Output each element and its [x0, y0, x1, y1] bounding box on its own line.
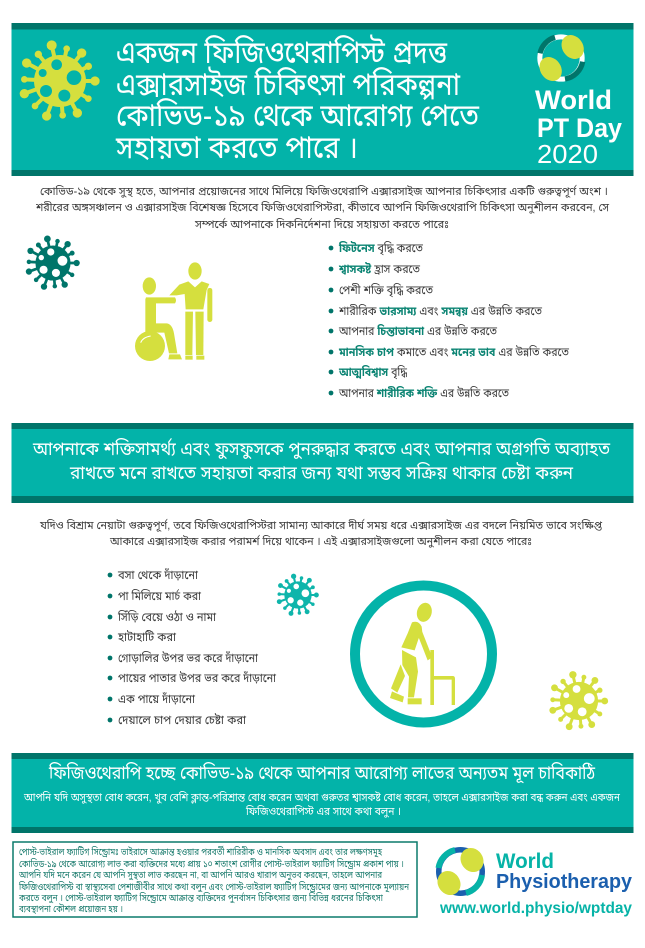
title: এক্সারসাইজ চিকিৎসা পরিকল্পনা	[116, 67, 461, 102]
logo: World PT Day 2020	[535, 31, 622, 169]
callout: post-viral fatigue syndrome: ফিজিওথেরাপিস্ট বা স্বাস্থ্যসেবা পেশাজীবীর সাথে কথা বলুন এবং পোস্ট-ভাইরাল ফ্যাটিগ সিন্ড্রোমের জন্য আপনাকে মূল্যায়ন	[18, 881, 409, 893]
callout: post-viral fatigue syndrome: পোস্ট-ভাইরাল ফ্যাটিগ সিন্ড্রোমঃ ভাইরাসে আক্রান্ত হওয়ার পরবর্তী শারিরীক ও মানসিক অবসাদ এবং তার লক্ষণসমূহ	[19, 846, 383, 858]
list: benefits: আপনার চিন্তাভাবনা এর উন্নতি করতে	[338, 323, 497, 338]
logo wordmark: World	[535, 85, 612, 115]
logo: World Physiotherapy	[433, 843, 633, 917]
logo wordmark	[535, 85, 622, 169]
intro paragraph: কোভিড-১৯ থেকে সুস্থ হতে, আপনার প্রয়োজনের সাথে মিলিয়ে ফিজিওথেরাপি এক্সারসাইজ আপনার চিকিৎসার একটি গুরুত্বপূর্ণ অংশ ।	[40, 184, 608, 198]
list: benefits: আপনার শারীরিক শক্তি এর উন্নতি করতে	[338, 385, 509, 400]
list: exercises: সিঁড়ি বেয়ে ওঠা ও নামা	[117, 609, 217, 624]
paragraph: short bursts advice	[39, 518, 602, 548]
banner: key to recovery	[12, 753, 634, 833]
callout: post-viral fatigue syndrome: ব্যবস্থাপনা কৌশল প্রয়োজন হয় ।	[18, 903, 123, 915]
paragraph: short bursts advice: যদিও বিশ্রাম নেয়াটা গুরুত্বপূর্ণ, তবে ফিজিওথেরাপিস্টরা সামান্য আকারে দীর্ঘ সময় ধরে এক্সারসাইজ এর বদলে নিয়মিত ভাবে সংক্ষিপ্ত	[39, 518, 602, 532]
logo wordmark: 2020	[537, 139, 598, 169]
icon: dark teal virus	[26, 236, 80, 290]
callout: post-viral fatigue syndrome	[13, 842, 417, 917]
intro paragraph: শরীরের অঙ্গসঞ্চালন ও এক্সারসাইজ বিশেষজ্ঞ হিসেবে ফিজিওথেরাপিস্টরা, কীভাবে আপনি ফিজিওথেরাপি চিকিৎসা অনুশীলন করবেন, সে	[35, 201, 610, 214]
illustration: walking person with chair in ring	[355, 586, 492, 722]
bullets	[108, 573, 112, 722]
list: benefits	[329, 240, 569, 400]
list: benefits: শ্বাসকষ্ট হ্রাস করতে	[338, 261, 420, 276]
list: exercises: বসা থেকে দাঁড়ানো	[117, 567, 199, 582]
callout: post-viral fatigue syndrome: কোভিড-১৯ থেকে আরোগ্য লাভ করা ব্যক্তিদের মধ্যে প্রায় ১০ শতাংশ রোগীর পোস্ট-ভাইরাল ফ্যাটিগ সিন্ড্রোম প্রকাশ পায় ।	[19, 858, 404, 870]
callout: post-viral fatigue syndrome: আপনি যদি মনে করেন যে আপনি সুস্থতা লাভ করছেন না, বা আপনি আরও খারাপ অনুভব করছেন, তাহলে আপনার	[18, 869, 382, 881]
list: benefits: মানসিক চাপ কমাতে এবং মনের ভাব এর উন্নতি করতে	[338, 344, 569, 359]
logo wordmark: PT Day	[537, 113, 622, 143]
list: benefits: পেশী শক্তি বৃদ্ধি করতে	[339, 282, 433, 298]
banner: stay active: আপনাকে শক্তিসামর্থ্য এবং ফুসফুসকে পুনরুদ্ধার করতে এবং আপনার অগ্রগতি অব্যাহত	[32, 438, 610, 460]
title: কোভিড-১৯ থেকে আরোগ্য পেতে	[116, 98, 480, 133]
title: সহায়তা করতে পারে ।	[115, 130, 358, 165]
banner: key to recovery: ফিজিওথেরাপিস্ট এর সাথে কথা বলুন ।	[245, 805, 401, 818]
list: exercises: গোড়ালির উপর ভর করে দাঁড়ানো	[118, 650, 259, 665]
website url: www.world.physio/wptday	[439, 900, 632, 917]
intro paragraph	[35, 184, 610, 231]
logo wordmark: World	[496, 850, 554, 873]
list: exercises: পা মিলিয়ে মার্চ করা	[118, 588, 202, 603]
icon: yellow virus	[20, 40, 100, 121]
bullets	[329, 246, 333, 395]
banner: stay active	[12, 423, 634, 503]
list: benefits: ফিটনেস বৃদ্ধি করতে	[338, 240, 423, 256]
icon: teal virus	[277, 574, 319, 616]
logo mark	[535, 31, 588, 85]
logo: World Physiotherapy: Physiotherapy	[496, 871, 633, 893]
list: exercises: হাটাহাটি করা	[117, 629, 177, 644]
header banner	[12, 23, 634, 176]
banner: stay active: রাখতে মনে রাখতে সহায়তা করার জন্য যথা সম্ভব সক্রিয় থাকার চেষ্টা করুন	[69, 463, 574, 483]
intro paragraph: সম্পর্কে আপনাকে দিকনির্দেশনা দিয়ে সহায়তা করতে পারেঃ	[194, 217, 449, 231]
list: benefits: শারীরিক ভারসাম্য এবং সমন্বয় এর উন্নতি করতে	[338, 303, 542, 318]
list: exercises: দেয়ালে চাপ দেয়ার চেষ্টা করা	[118, 712, 247, 727]
paragraph: short bursts advice: আকারে এক্সারসাইজ করার পরামর্শ দিয়ে থাকেন । এই এক্সারসাইজগুলো অনুশীলন করা যেতে পারেঃ	[109, 534, 532, 548]
title	[115, 35, 480, 165]
title: একজন ফিজিওথেরাপিস্ট প্রদত্ত	[116, 35, 448, 70]
list: benefits: আত্মবিশ্বাস বৃদ্ধি	[338, 364, 408, 380]
list: exercises	[108, 567, 277, 727]
callout: post-viral fatigue syndrome: করতে বলুন । পোস্ট-ভাইরাল ফ্যাটিগ সিন্ড্রোমে আক্রান্ত ব্যক্তিদের পুনর্বাসন চিকিৎসার জন্য বিভিন্ন ধরনের চিকিৎসা	[18, 892, 383, 904]
icon: yellow virus lower right	[549, 671, 608, 730]
list: exercises: এক পায়ে দাঁড়ানো	[118, 691, 196, 706]
list: exercises: পায়ের পাতার উপর ভর করে দাঁড়ানো	[118, 670, 277, 685]
logo mark	[433, 843, 488, 900]
illustration: physiotherapist with patient on exercise ball	[135, 262, 212, 361]
